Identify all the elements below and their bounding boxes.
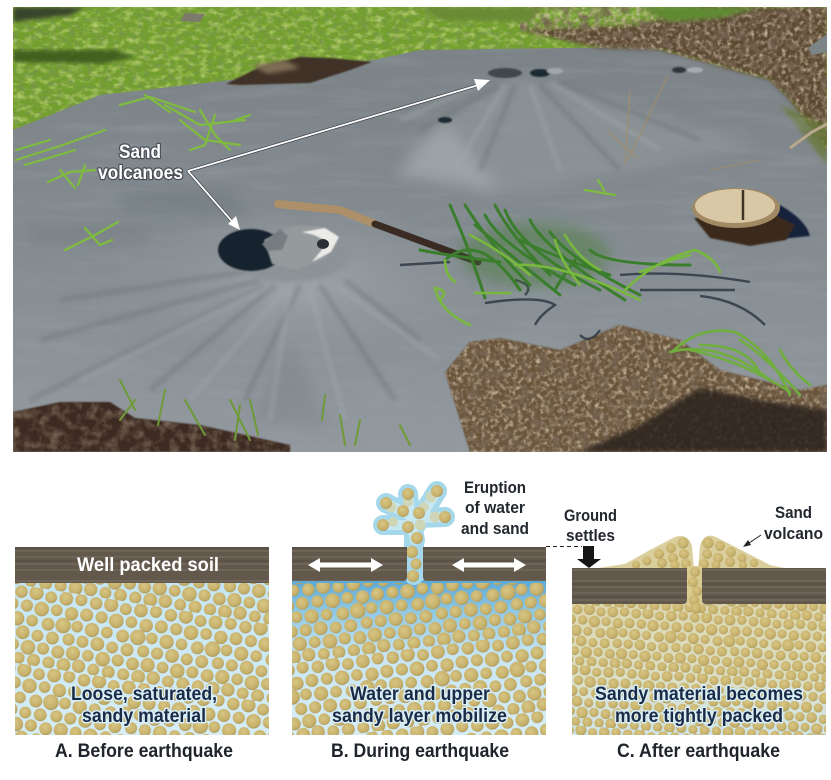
icon: distant sand volcano vents [438,67,703,123]
branch [278,204,478,262]
label: water and upper sandy layer mobilize: sandy layer mobilize [332,706,507,727]
label: ground settles: settles [566,526,615,545]
panel A: before earthquake [15,547,269,762]
sand grains [292,583,546,735]
label: well packed soil: Well packed soil [77,555,219,576]
caption C: C. After earthquake [617,741,780,762]
label: eruption of water and sand [461,478,529,538]
label: sand volcano: volcano [764,524,823,543]
water background [292,580,546,735]
label: ground settles: Ground [564,506,617,525]
packed sand grains [572,604,826,735]
icon: tree stump [692,188,810,246]
label: sand volcano [764,503,823,543]
grass tufts [16,95,810,445]
label: water and upper sandy layer mobilize: Water and upper [350,684,491,705]
arrow: right block motion [452,558,526,572]
label: sandy material becomes more tightly packed: Sandy material becomes [595,684,803,705]
dashed line: former ground level [546,546,582,548]
label: eruption of water and sand: of water [465,498,525,517]
label: loose saturated sandy material: sandy material [82,706,206,727]
arrow: ground settles [577,546,601,568]
label: sand volcanoes: volcanoes [98,163,183,184]
callout: sand volcanoes arrows [188,79,490,230]
label: water and upper sandy layer mobilize [332,684,507,727]
label: loose saturated sandy material [71,684,217,727]
mound debris [13,13,830,455]
sand surface shading [128,48,827,423]
panel: sand volcano photograph [13,7,830,455]
photo background and grass field [13,7,827,452]
icon: radial flow streaks [30,82,700,420]
caption A: A. Before earthquake [55,741,233,762]
icon: foreground sand volcano [218,226,352,282]
eruption plume [377,485,451,582]
sand grains [15,583,269,735]
soil layer, left block [572,568,687,604]
label: loose saturated sandy material: Loose, saturated, [71,684,217,705]
label: eruption of water and sand: Eruption [464,478,526,497]
sand background [572,600,826,735]
label: sand volcano: Sand [775,503,812,522]
dry stalks [608,75,760,170]
label: sand volcanoes: Sand [119,142,161,163]
arrow: left block motion [308,558,383,572]
leaf shadows on sand [400,262,765,339]
label: sandy material becomes more tightly packed [595,684,803,727]
soil layer, right block [423,547,546,581]
label: sandy material becomes more tightly packed: more tightly packed [615,706,783,727]
caption B: B. During earthquake [331,741,509,762]
label: eruption of water and sand: and sand [461,519,529,538]
sand volcano cone [598,536,784,614]
soil layer, right block [702,568,826,604]
water background [15,580,269,735]
soil layer [15,547,269,583]
panel C: after earthquake [546,503,826,762]
panel B: during earthquake [292,478,546,762]
label: ground settles [564,506,617,545]
soil layer, left block [292,547,407,581]
arrow: to sand volcano [743,535,761,547]
label: sand volcanoes [98,142,183,184]
